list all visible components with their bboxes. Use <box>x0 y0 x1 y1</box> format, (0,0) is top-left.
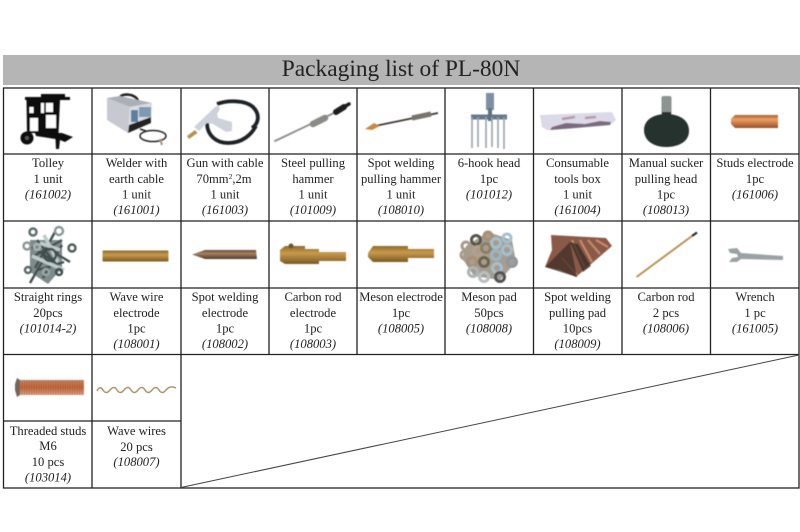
icon: six hook head <box>471 93 507 149</box>
label: Straight rings <box>14 290 82 304</box>
item: 6-hook head: (101012) <box>466 188 512 202</box>
icon: carbon rod electrode <box>280 244 346 264</box>
icon: studs electrode <box>731 115 778 128</box>
title: Packaging list of PL-80N <box>282 56 520 82</box>
item: 6-hook head <box>458 93 521 202</box>
item: Studs electrode <box>716 115 794 202</box>
item: Consumable tools box: 1 unit <box>563 188 593 202</box>
item: 6-hook head: 1pc <box>480 172 498 186</box>
item: Consumable tools box: tools box <box>554 172 601 186</box>
label: Wave wire <box>110 290 164 304</box>
item: Meson pad: (108008) <box>466 322 512 336</box>
icon: carbon rod <box>636 232 697 277</box>
item: Studs electrode: 1pc <box>746 172 764 186</box>
item: Welder with earth cable: 1 unit <box>122 188 152 202</box>
item: Threaded studs: M6 <box>39 439 57 453</box>
item: Spot welding electrode: 1pc <box>216 322 234 336</box>
item: Meson electrode: (108005) <box>378 322 424 336</box>
item: Carbon rod <box>636 232 697 336</box>
item: Gun with cable: ,2m <box>232 172 252 186</box>
item: Straight rings: (101014-2) <box>20 322 76 336</box>
label: Carbon rod <box>284 290 342 304</box>
item: Spot welding electrode: electrode <box>202 306 248 320</box>
item: Threaded studs <box>10 378 86 484</box>
item: Gun with cable: 1 unit <box>210 188 240 202</box>
icon: straight rings <box>24 227 76 284</box>
item: Welder with earth cable <box>106 95 168 217</box>
item: Tolley: (161002) <box>25 188 71 202</box>
label: 6-hook head <box>458 156 521 170</box>
label: Studs electrode <box>716 156 794 170</box>
item: Wrench: (161005) <box>732 322 778 336</box>
icon: wave wire electrode <box>102 250 168 262</box>
item: Wave wire electrode: electrode <box>113 306 160 320</box>
icon: meson electrode <box>368 246 434 262</box>
item: Spot welding pulling hammer <box>361 113 442 217</box>
item: Consumable tools box <box>540 112 616 217</box>
item: Spot welding pulling pad: pulling pad <box>549 306 607 320</box>
label: Wrench <box>735 290 775 304</box>
item: Carbon rod electrode <box>280 244 346 351</box>
icon: meson pads <box>461 232 516 282</box>
item: Wave wires: 20 pcs <box>120 440 153 454</box>
label: Spot welding <box>544 290 612 304</box>
icon: pulling pads <box>545 235 612 277</box>
title band <box>3 55 800 85</box>
label: Carbon rod <box>637 290 695 304</box>
item: Tolley: 1 unit <box>33 172 63 186</box>
table grid <box>4 88 799 488</box>
item: Threaded studs: (103014) <box>25 470 71 484</box>
label: Threaded studs <box>10 424 86 438</box>
item: Manual sucker pulling head: pulling head <box>635 172 698 186</box>
item: Carbon rod: (108006) <box>643 322 689 336</box>
item: Carbon rod electrode: 1pc <box>304 322 322 336</box>
label: Meson pad <box>461 290 518 304</box>
icon: steel pulling hammer <box>275 104 349 141</box>
icon: wrench <box>728 248 783 262</box>
item: Manual sucker pulling head <box>629 96 704 217</box>
item: Wrench: 1 pc <box>744 306 766 320</box>
item: Wave wire electrode: 1pc <box>127 322 146 336</box>
label: Tolley <box>32 156 65 170</box>
item: Wrench <box>728 248 783 336</box>
item: Welder with earth cable: (161001) <box>113 203 160 217</box>
item: Studs electrode: (161006) <box>732 188 778 202</box>
item: Carbon rod electrode: (108003) <box>290 337 336 351</box>
item: Gun with cable: (161003) <box>202 203 248 217</box>
label: Wave wires <box>107 424 166 438</box>
item: Straight rings <box>14 227 82 336</box>
item: Spot welding pulling hammer: pulling hammer <box>361 172 442 186</box>
item: Steel pulling hammer: 1 unit <box>298 188 328 202</box>
icon: tools box <box>540 112 616 130</box>
item: Wave wire electrode <box>102 250 168 351</box>
item: Gun with cable: 70mm <box>196 172 229 186</box>
item: Welder with earth cable: earth cable <box>109 172 164 186</box>
item: Spot welding pulling hammer: 1 unit <box>386 188 416 202</box>
label: Manual sucker <box>629 156 704 170</box>
label: Steel pulling <box>281 156 346 170</box>
icon: spot welding electrode <box>192 250 257 259</box>
item: Manual sucker pulling head: (108013) <box>643 203 689 217</box>
label: Spot welding <box>192 290 259 304</box>
label: Gun with cable <box>187 156 264 170</box>
icon: wave wire <box>97 387 176 392</box>
item: Steel pulling hammer: (101009) <box>290 203 336 217</box>
empty cell diagonal <box>181 355 799 488</box>
icon: suction cup <box>644 96 689 147</box>
item: Manual sucker pulling head: 1pc <box>657 188 676 202</box>
item: Threaded studs: 10 pcs <box>32 455 64 469</box>
item: Wave wires <box>97 387 176 469</box>
label: Spot welding <box>368 156 435 170</box>
icon: spot welding pulling hammer <box>365 113 438 130</box>
icon: trolley <box>20 94 73 149</box>
item: Consumable tools box: (161004) <box>554 203 601 217</box>
item: Carbon rod: 2 pcs <box>653 306 679 320</box>
icon: welder <box>107 95 166 145</box>
label: Welder with <box>106 156 168 170</box>
item: Tolley <box>20 94 73 202</box>
item: Spot welding pulling pad: 10pcs <box>563 322 592 336</box>
item: Spot welding electrode <box>192 250 259 351</box>
item: Gun with cable: 2 <box>229 172 233 181</box>
item: Steel pulling hammer <box>275 104 349 217</box>
item: Meson electrode <box>359 246 443 336</box>
item: Meson pad <box>461 232 518 336</box>
icon: threaded stud <box>15 378 84 397</box>
item: Spot welding electrode: (108002) <box>202 337 248 351</box>
label: Meson electrode <box>359 290 443 304</box>
item: Spot welding pulling pad <box>544 235 612 351</box>
item: Wave wire electrode: (108001) <box>113 337 160 351</box>
item: Straight rings: 20pcs <box>33 306 63 320</box>
item: Steel pulling hammer: hammer <box>292 172 334 186</box>
item: Meson pad: 50pcs <box>474 306 504 320</box>
item: Spot welding pulling pad: (108009) <box>554 337 601 351</box>
icon: welding gun <box>187 101 258 143</box>
item: Carbon rod electrode: electrode <box>290 306 336 320</box>
item: Spot welding pulling hammer: (108010) <box>378 203 424 217</box>
item: Wave wires: (108007) <box>113 455 160 469</box>
item: Gun with cable <box>187 101 264 217</box>
item: Meson electrode: 1pc <box>392 306 410 320</box>
label: Consumable <box>546 156 609 170</box>
